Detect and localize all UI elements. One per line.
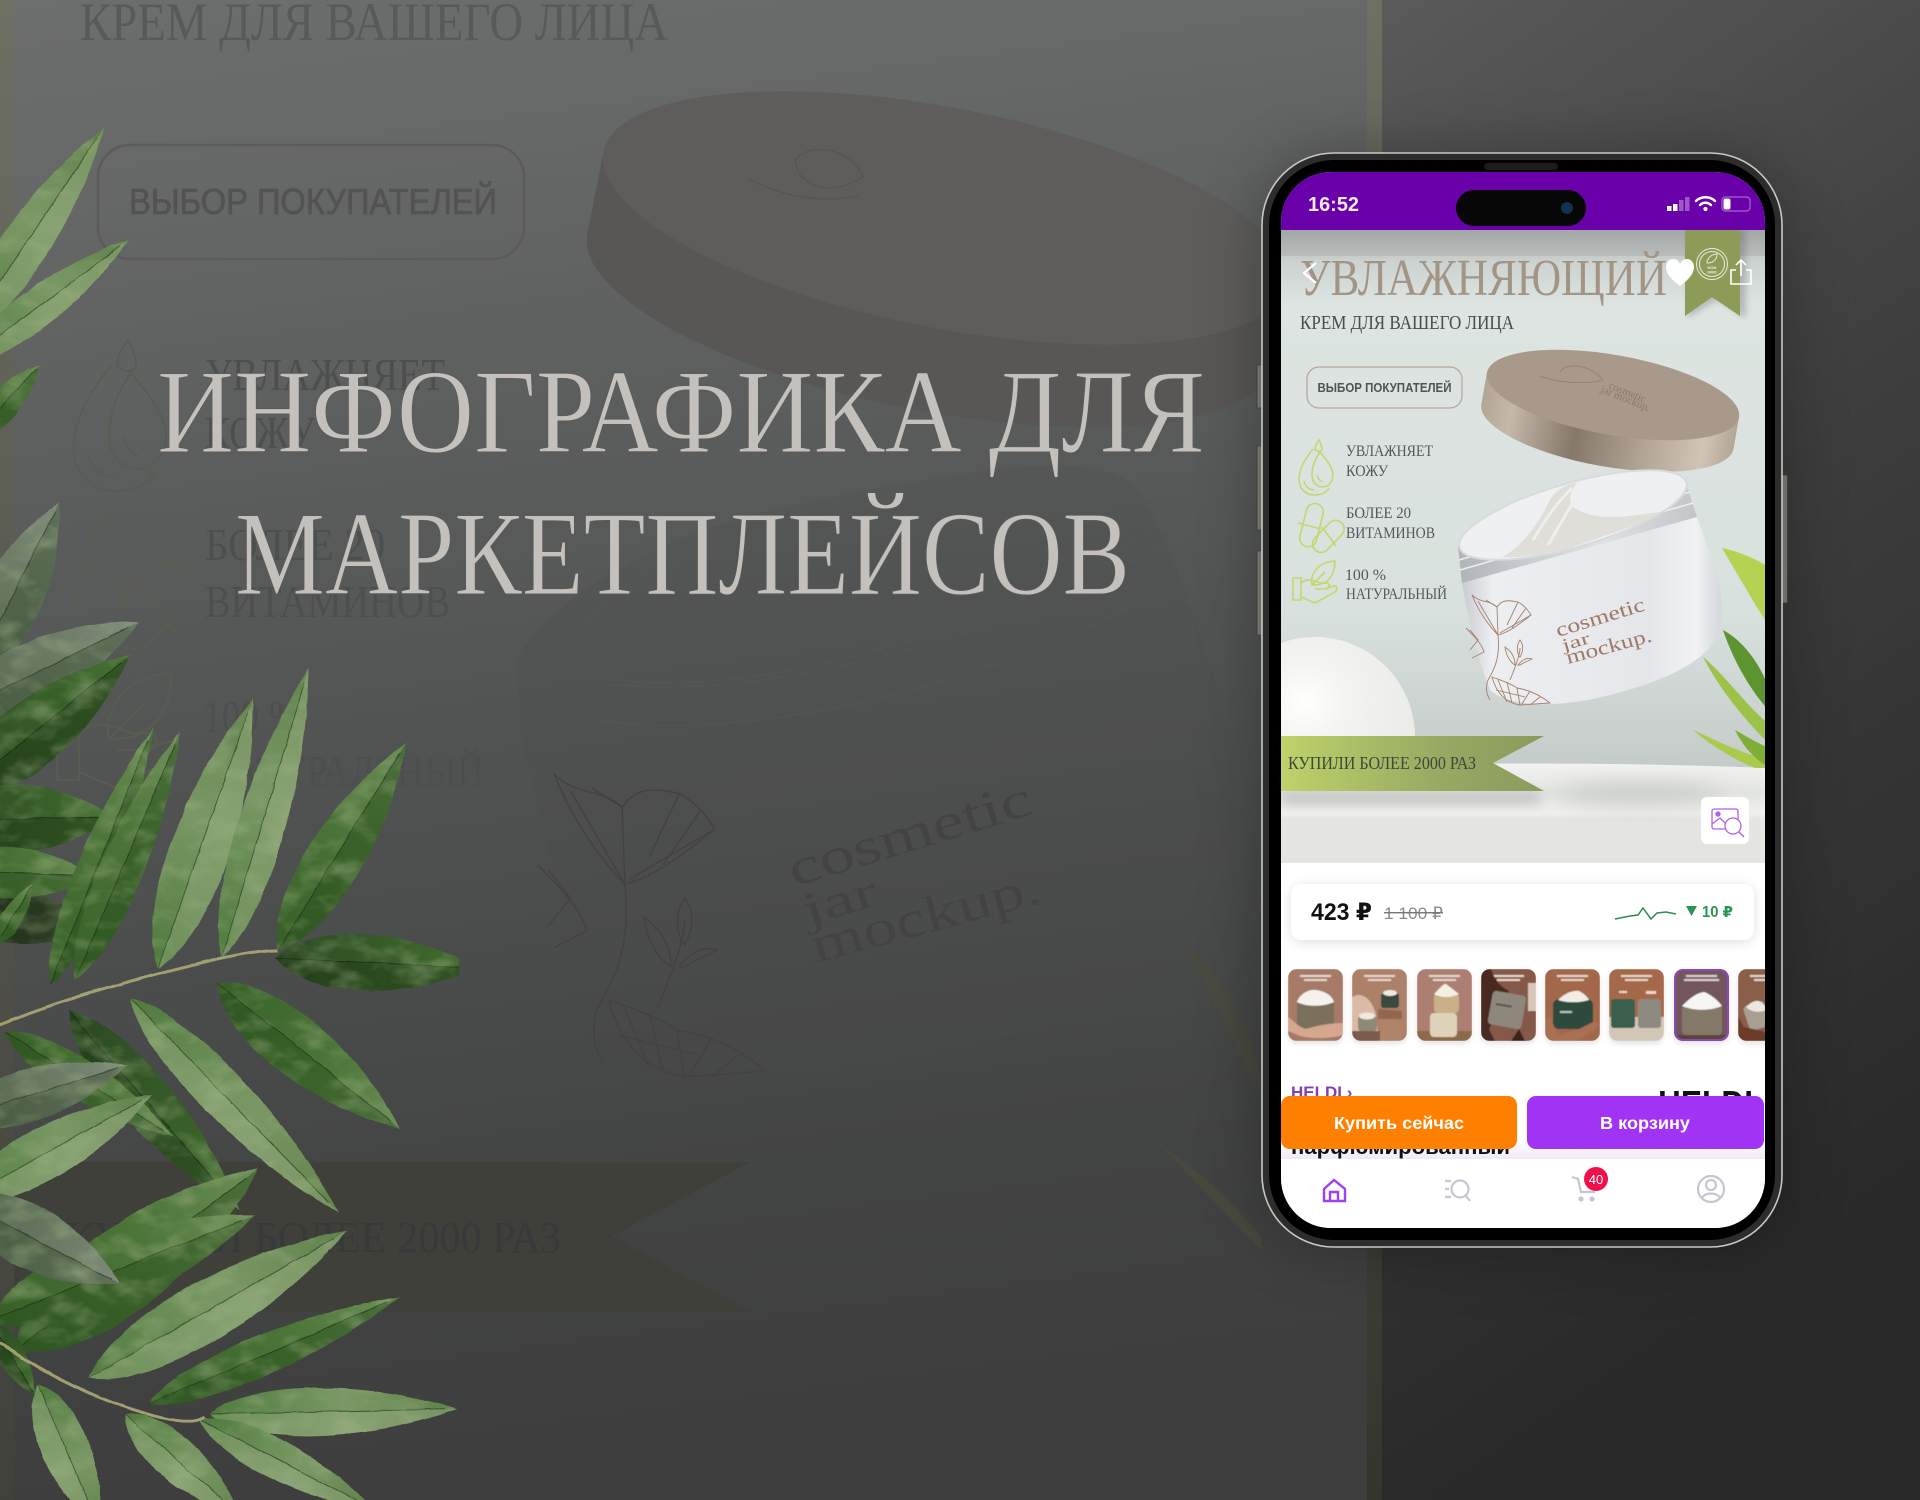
ghost ribbon text: КУПИЛИ БОЛЕЕ 2000 РАЗ xyxy=(66,1213,561,1262)
lavender fade above tabs xyxy=(1281,1140,1765,1160)
jar xyxy=(1451,452,1722,705)
top shade xyxy=(1281,230,1765,256)
feature: vitamins: БОЛЕЕ 20 xyxy=(1346,505,1411,522)
ghost badge: ВЫБОР ПОКУПАТЕЛЕЙ xyxy=(129,180,497,222)
current price: 423 ₽ xyxy=(1311,899,1372,926)
buy now button: Купить сейчас xyxy=(1334,1113,1464,1133)
ghost jar wordmark: cosmetic xyxy=(781,770,1038,898)
jar wordmark: jar xyxy=(1558,628,1592,655)
jar mouth xyxy=(1458,469,1688,561)
side buttons xyxy=(1257,365,1788,635)
dynamic island xyxy=(1456,190,1586,226)
front grass xyxy=(1693,730,1770,768)
badge: buyers' choice xyxy=(1307,367,1462,408)
screen base xyxy=(1281,172,1765,1228)
search tab xyxy=(1445,1180,1470,1201)
non-GMO badge: GMO xyxy=(1707,270,1717,274)
hero background xyxy=(1281,230,1765,768)
ghost feature text: ВИТАМИНОВ xyxy=(205,576,450,627)
ribbon text: КУПИЛИ БОЛЕЕ 2000 РАЗ xyxy=(1288,753,1476,773)
tropical leaves xyxy=(1703,548,1770,745)
product name: парфюмированный xyxy=(1291,1136,1510,1159)
ghost jar wordmark: mockup. xyxy=(804,858,1047,975)
price drop xyxy=(1686,904,1733,921)
ghost feature text xyxy=(203,349,484,797)
phone bezel xyxy=(1269,160,1775,1240)
title xyxy=(157,345,1205,620)
ghost jar lid xyxy=(566,44,1308,475)
ghost feature text: БОЛЕЕ 20 xyxy=(205,519,385,570)
ghosted product poster behind the title xyxy=(14,0,1308,1312)
ghost jar wordmark: jar xyxy=(793,865,884,936)
ghost lid logo xyxy=(748,133,867,210)
jar threads xyxy=(1459,492,1693,570)
feature: vitamins: ВИТАМИНОВ xyxy=(1346,525,1435,542)
ghost jar xyxy=(516,466,1238,1077)
feature: moisturizes: КОЖУ xyxy=(1346,463,1389,480)
home tab xyxy=(1324,1180,1345,1201)
cream xyxy=(1502,483,1660,557)
jar wordmark: mockup. xyxy=(1564,625,1654,669)
lower branch stem xyxy=(0,1343,204,1421)
olive branches xyxy=(0,115,481,1500)
thumbnail 3 xyxy=(1417,969,1472,1041)
add to cart button: В корзину xyxy=(1600,1113,1690,1133)
thumbnail 2 xyxy=(1352,969,1407,1041)
platform shadow xyxy=(1555,785,1725,803)
jar botanical drawing xyxy=(1466,595,1550,705)
feature: natural xyxy=(1293,561,1447,603)
heart icon xyxy=(1666,259,1694,286)
lid logo xyxy=(1540,366,1652,415)
upper left olive leaves xyxy=(0,115,153,826)
sphere xyxy=(1281,637,1415,736)
thumbnail 1 xyxy=(1288,969,1343,1041)
product subtitle: КРЕМ ДЛЯ ВАШЕГО ЛИЦА xyxy=(1300,312,1514,334)
platform xyxy=(1281,763,1770,863)
add to cart button xyxy=(1527,1096,1764,1149)
camera xyxy=(1561,202,1573,214)
feature: natural: 100 % xyxy=(1345,567,1386,584)
ghost grass leaves xyxy=(1159,945,1262,1250)
title line 1: ИНФОГРАФИКА ДЛЯ xyxy=(157,345,1205,478)
ghost feature text: НАТУРАЛЬНЫЙ xyxy=(205,746,484,797)
jar neck xyxy=(1458,480,1697,583)
ghost feature text: 100 % xyxy=(203,691,300,742)
certificate bookmark xyxy=(1685,230,1746,318)
feature: natural: НАТУРАЛЬНЫЙ xyxy=(1346,584,1447,603)
feature: vitamins xyxy=(1298,502,1435,556)
ghost ribbon xyxy=(14,1162,750,1312)
jar wordmark xyxy=(1553,594,1654,669)
brand link: HELDI › xyxy=(1291,1083,1352,1102)
price card xyxy=(1291,884,1754,942)
phone body xyxy=(1262,153,1782,1247)
tab bar xyxy=(1281,1159,1765,1228)
thumbnail 5 xyxy=(1545,969,1600,1041)
jar wordmark: cosmetic xyxy=(1553,594,1648,642)
ghost jar rim xyxy=(554,383,1239,781)
ghost feature icons xyxy=(57,340,206,788)
cart badge xyxy=(1584,1167,1608,1191)
price sparkline xyxy=(1615,908,1676,919)
brand wordmark: HELDI xyxy=(1658,1083,1753,1124)
wifi icon xyxy=(1696,197,1715,210)
thumbnail shadows xyxy=(1288,972,1793,1044)
cream swirl xyxy=(1533,488,1576,545)
jar lid xyxy=(1481,350,1740,472)
badge: buyers' choice: ВЫБОР ПОКУПАТЕЛЕЙ xyxy=(1318,380,1452,395)
feature: moisturizes xyxy=(1299,440,1433,495)
thumbnail 6 xyxy=(1609,969,1664,1041)
clock: 16:52 xyxy=(1308,193,1359,216)
lid logo: cosmetic xyxy=(1607,380,1648,405)
signal bars xyxy=(1667,197,1690,211)
image search button xyxy=(1701,797,1749,844)
product hero image xyxy=(1281,230,1765,863)
non-GMO badge: NON xyxy=(1708,265,1717,270)
title line 2: МАРКЕТПЛЕЙСОВ xyxy=(235,487,1130,620)
ghost badge xyxy=(98,145,524,259)
earpiece xyxy=(1484,163,1558,170)
old price: 1 100 ₽ xyxy=(1384,904,1443,923)
jar body xyxy=(1461,517,1722,704)
cart tab xyxy=(1572,1177,1595,1200)
lid logo: jar mockup. xyxy=(1598,383,1652,415)
ribbon shadow xyxy=(1281,792,1540,804)
product title: УВЛАЖНЯЮЩИЙ xyxy=(1300,250,1667,307)
ribbon xyxy=(1281,736,1544,791)
back chevron xyxy=(1304,263,1316,283)
share icon xyxy=(1731,260,1751,284)
thumbnail 8 xyxy=(1738,969,1793,1041)
non-GMO badge xyxy=(1696,248,1728,280)
ghost jar wordmark xyxy=(781,770,1047,975)
ghost feature text: КОЖУ xyxy=(205,407,315,458)
middle olive leaves xyxy=(0,661,481,1230)
price drop: 10 ₽ xyxy=(1702,904,1733,921)
thumbnail 7 xyxy=(1674,969,1729,1041)
phone shadow xyxy=(1255,150,1790,1255)
screen xyxy=(1281,172,1765,1228)
cart badge: 40 xyxy=(1589,1172,1603,1187)
status bar xyxy=(1281,172,1765,230)
buy now button xyxy=(1281,1096,1517,1149)
gallery thumbnails xyxy=(1288,969,1793,1044)
battery xyxy=(1722,197,1750,211)
upper branch stem xyxy=(0,950,278,1026)
feature: moisturizes: УВЛАЖНЯЕТ xyxy=(1346,443,1433,460)
ghost botanical drawing xyxy=(538,774,766,1077)
profile tab xyxy=(1698,1176,1724,1202)
lower olive leaves xyxy=(0,1135,457,1500)
phone mockup xyxy=(1215,150,1793,1255)
thumbnail 4 xyxy=(1481,969,1536,1041)
ghost feature text: УВЛАЖНЯЕТ xyxy=(205,349,445,400)
